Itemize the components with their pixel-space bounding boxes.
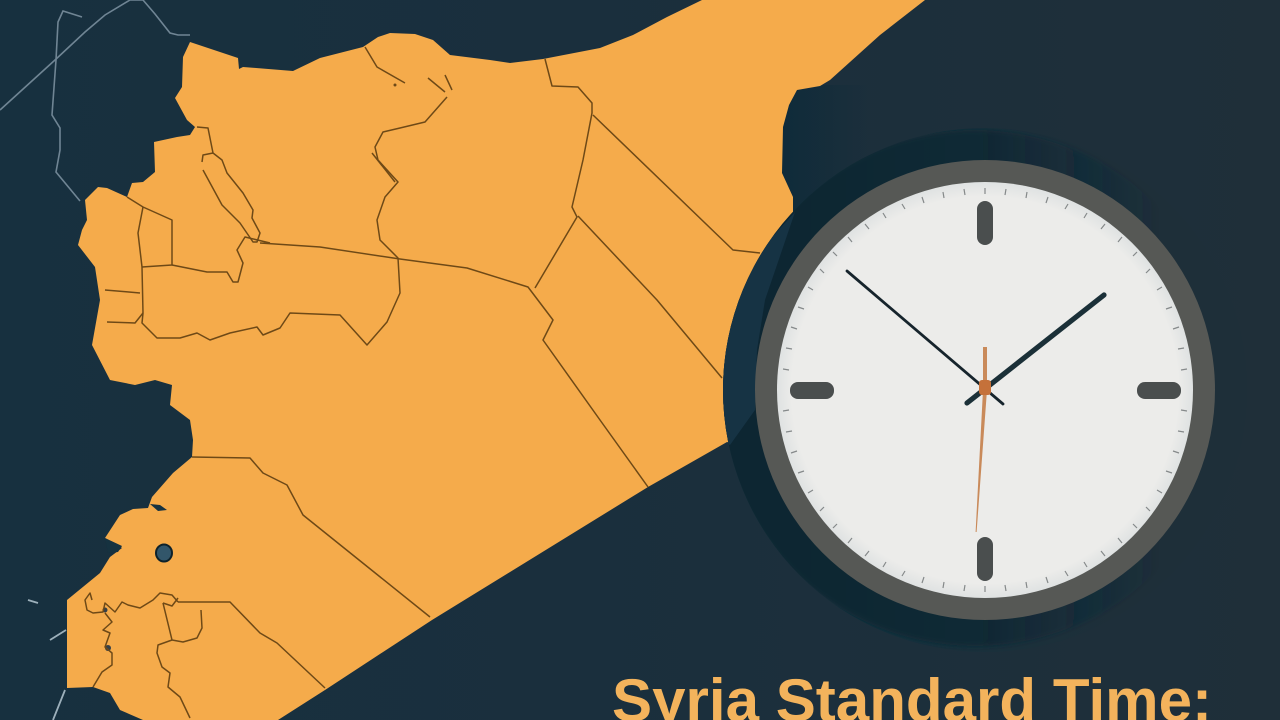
second hand [976,347,987,532]
hour hand [967,295,1104,403]
centre hub [979,380,991,395]
hour markers [790,201,1181,581]
clock [755,160,1215,620]
clock face [777,182,1193,598]
clock shadow [723,128,1108,648]
bay shading [780,85,870,215]
minute ticks [783,188,1187,592]
shadow: cast dark [723,130,1103,646]
shadow: light halo [723,128,1247,652]
map: province borders [85,47,760,718]
map: Syria silhouette [67,0,925,720]
minute hand [847,271,1003,404]
map: small settlement dot [394,84,396,86]
map group [0,0,925,720]
map: neighbouring borders [0,0,190,720]
map: lakes and coastal notches [102,504,172,651]
shadow: lighter crescent [723,213,794,445]
clock rim [755,160,1215,620]
lake [156,544,172,562]
